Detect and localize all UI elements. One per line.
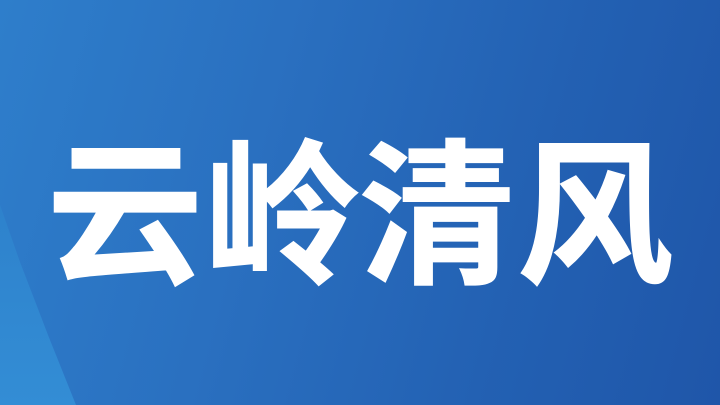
title: 云 [47,131,203,305]
title: 风 [517,131,673,305]
title: 清 [359,131,515,305]
title: 岭 [205,131,361,305]
